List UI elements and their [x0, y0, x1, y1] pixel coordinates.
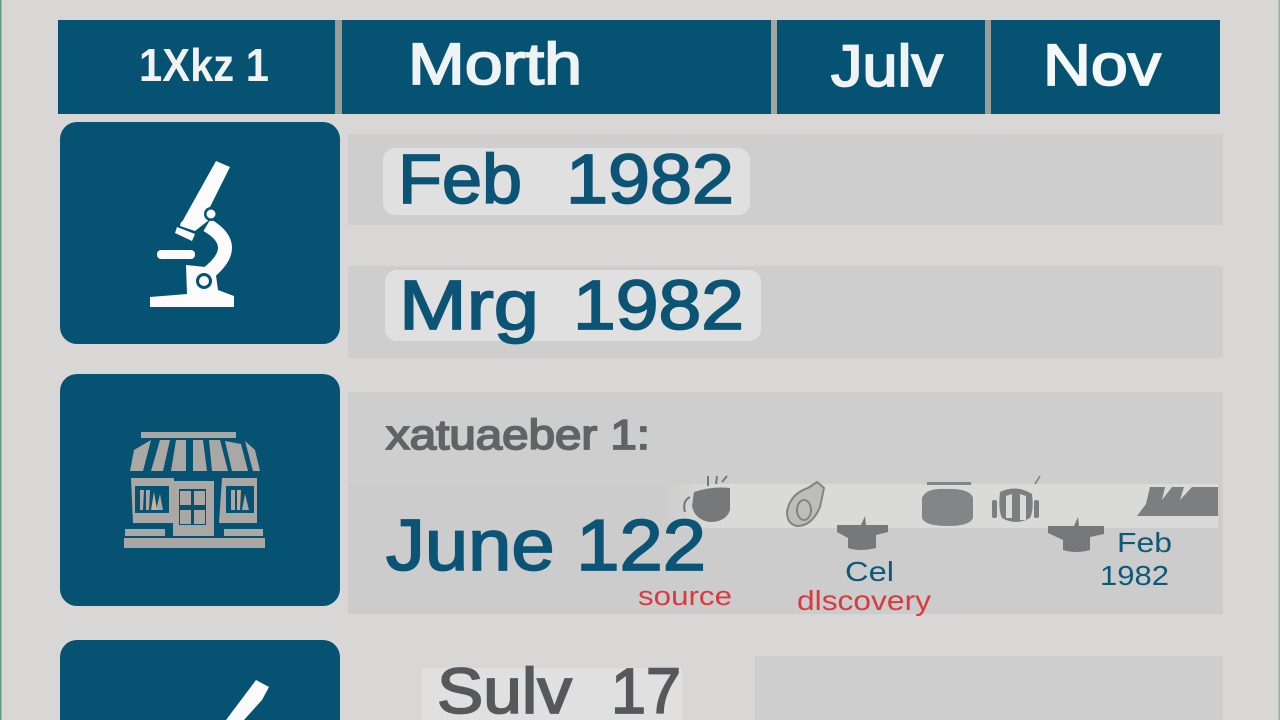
icon: grey anvil two: [1048, 517, 1104, 552]
date: Feb 1982: 1982: [566, 140, 734, 218]
panel: row background 1: [348, 134, 1223, 225]
icon: spiral gourd: [787, 482, 824, 526]
date: Sulv 17: [422, 655, 682, 720]
date: Mrg 1982: [385, 266, 761, 344]
icon: striped drum: [992, 476, 1040, 522]
panel: row background 4: [348, 484, 1223, 614]
date: Feb 1982: [383, 140, 750, 218]
panel: row background 2: [348, 266, 1223, 358]
icon: row of blocks: [1137, 487, 1218, 516]
icon: microscope: [150, 161, 234, 307]
label: Feb 1982: Feb: [1117, 527, 1172, 558]
icon: coffee cup: [684, 476, 730, 522]
label: source: source: [638, 581, 732, 611]
header bar: [58, 20, 1220, 114]
panel: row background 5: [755, 656, 1223, 720]
panel: shop card: [60, 374, 340, 606]
header: garbled year label: 1Xkz 1: [139, 39, 269, 91]
label: Feb 1982: 1982: [1100, 560, 1169, 591]
icon: round pot: [922, 482, 973, 526]
date: garbled month: xatuaeber 1:: [386, 411, 650, 458]
icon: pen tip: [226, 680, 269, 720]
date: June 122: June 122: [386, 506, 706, 586]
panel: row background 3: [348, 392, 1223, 484]
icon: shop: [124, 432, 265, 548]
label: Cel discovery: Cel: [845, 556, 894, 587]
label: Cel discovery: dlscovery: [797, 585, 931, 616]
header: Morth: Morth: [408, 32, 582, 97]
icon: grey anvil one: [837, 516, 888, 550]
label: Feb 1982: [1100, 527, 1172, 591]
date: Mrg 1982: Mrg: [399, 266, 539, 344]
header: Nov: Nov: [1043, 33, 1161, 98]
panel: light band behind icons: [660, 484, 1218, 528]
date: Mrg 1982: 1982: [573, 266, 744, 344]
date: Feb 1982: Feb: [398, 140, 522, 218]
panel: bottom card: [60, 640, 340, 720]
header: Julv: Julv: [831, 34, 943, 99]
label: Cel discovery: [797, 556, 931, 616]
panel: microscope card: [60, 122, 340, 344]
